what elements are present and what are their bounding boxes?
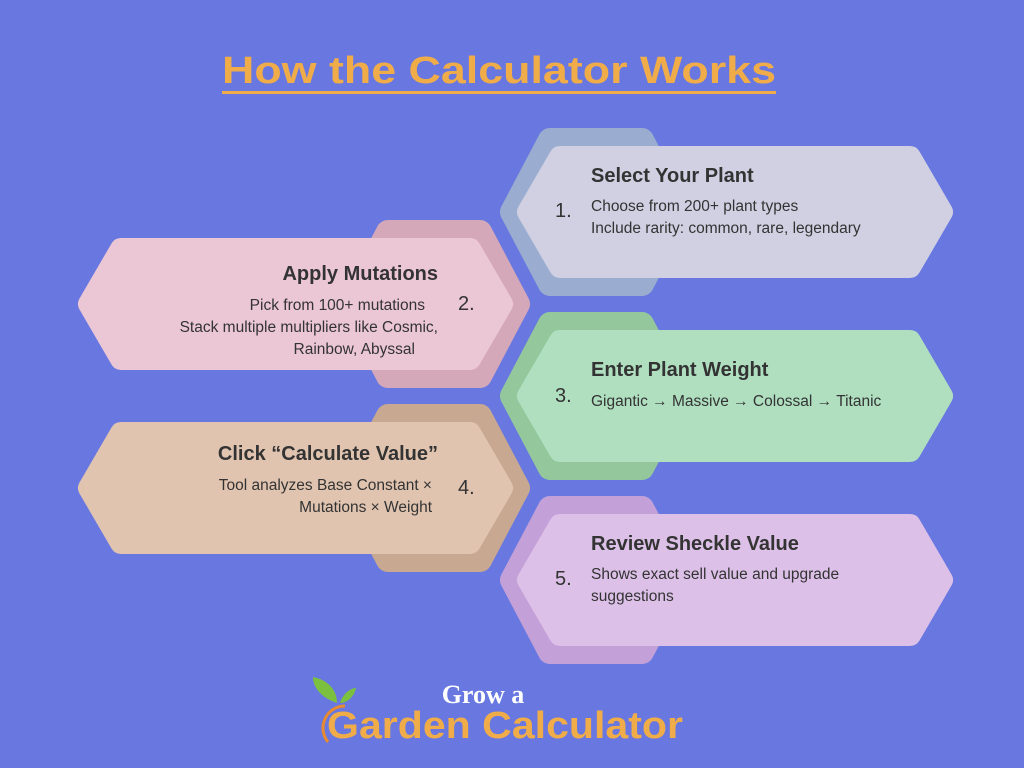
step 1: select your plant: Select Your Plant <box>591 165 754 187</box>
step 2: apply mutations: Pick from 100+ mutations <box>250 297 425 314</box>
step 4: click calculate value: 4. <box>458 477 475 499</box>
title: How the Calculator Works <box>222 50 776 92</box>
step 1: select your plant: 1. <box>555 200 572 222</box>
step 2: apply mutations <box>89 232 518 376</box>
logo <box>313 677 683 747</box>
step 1: select your plant: Choose from 200+ plant types <box>591 198 798 215</box>
step 2: apply mutations: 2. <box>458 293 475 315</box>
step 2: apply mutations: Stack multiple multipliers like Cosmic, <box>180 319 438 336</box>
logo: Garden Calculator <box>327 705 683 747</box>
step 3: enter plant weight: Gigantic → Massive → Colossal → Titanic <box>591 393 882 410</box>
step 3: enter plant weight: 3. <box>555 385 572 407</box>
step 5: review sheckle value <box>512 508 942 652</box>
step 4: click calculate value: Tool analyzes Base Constant × <box>219 477 432 494</box>
step 5: review sheckle value: suggestions <box>591 588 674 605</box>
step 2: apply mutations: Apply Mutations <box>282 263 438 285</box>
icon: leaves and orange arc <box>313 677 356 742</box>
step 2: apply mutations: Rainbow, Abyssal <box>294 341 415 358</box>
step 3: enter plant weight <box>512 324 942 468</box>
step 4: click calculate value: Mutations × Weight <box>299 499 433 516</box>
step 1: select your plant <box>512 140 942 284</box>
step 4: click calculate value <box>89 416 518 560</box>
step 5: review sheckle value: 5. <box>555 568 572 590</box>
step 5: review sheckle value: Review Sheckle Value <box>591 533 799 555</box>
logo: Grow a <box>442 680 524 709</box>
step 5: review sheckle value: Shows exact sell value and upgrade <box>591 566 839 583</box>
step 1: select your plant: Include rarity: common, rare, legendary <box>591 220 861 237</box>
step 4: click calculate value: Click “Calculate Value” <box>218 443 438 465</box>
step 3: enter plant weight: Enter Plant Weight <box>591 359 769 381</box>
